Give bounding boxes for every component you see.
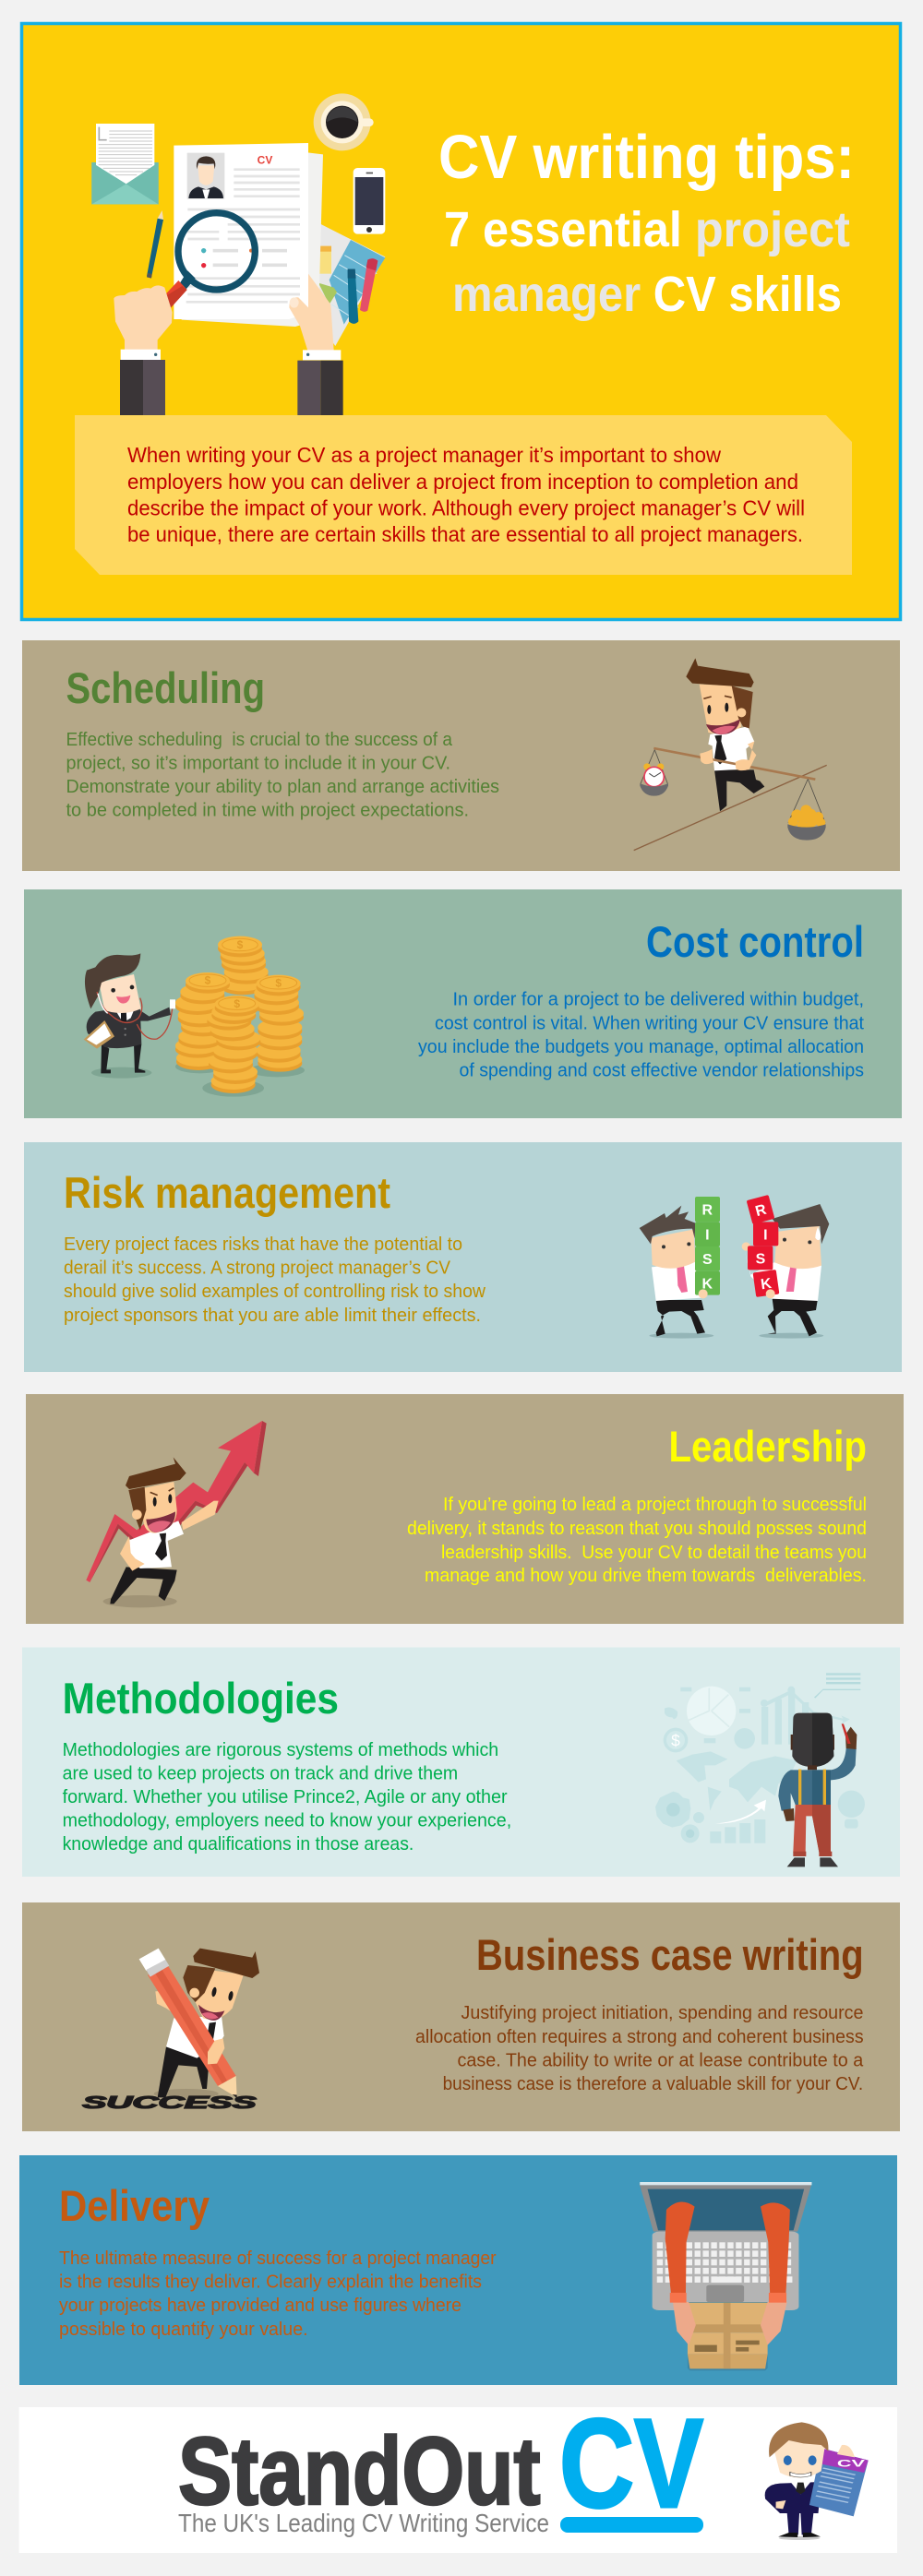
icon: man drawing business chart: $ <box>671 1731 680 1749</box>
pencil <box>148 1965 236 2086</box>
icon: man with stethoscope and coin stacks: $ <box>237 938 244 951</box>
front stack <box>207 996 260 1093</box>
icon: notebook and pens <box>318 223 385 346</box>
icon: CV document <box>174 143 323 327</box>
panel: risk management <box>24 1142 902 1372</box>
text block: delivery: is the results they deliver. Clearly explain the benefits <box>59 2272 482 2292</box>
text block: scheduling: to be completed in time with project expectations. <box>66 799 469 821</box>
text block: methodologies: knowledge and qualifications in those areas. <box>63 1833 414 1854</box>
text block: methodologies <box>63 1739 511 1854</box>
panel: hero header <box>22 24 901 620</box>
panel: business case writing <box>22 1902 900 2131</box>
text block: business case writing: allocation often requires a strong and coherent business <box>415 2026 864 2047</box>
heading: delivery: Delivery <box>59 2181 210 2230</box>
callout: introduction: employers how you can deliver a project from inception to completion and <box>127 470 798 494</box>
text block: scheduling: project, so it’s important to include it in your CV. <box>66 753 450 773</box>
icon: envelope with letter <box>91 124 159 204</box>
icon: pencil <box>147 210 163 279</box>
icon: man drawing business chart <box>655 1673 865 1866</box>
icon: magnifying glass <box>164 213 255 309</box>
icon: coffee cup <box>314 93 374 150</box>
text block: risk management: project sponsors that you are able limit their effects. <box>64 1305 481 1326</box>
title: CV writing tips: <box>438 123 855 192</box>
callout: introduction: When writing your CV as a project manager it’s important to show <box>127 443 721 467</box>
green blocks: R <box>702 1202 713 1218</box>
icon: mascot holding CV: CV <box>837 2457 866 2469</box>
text block: methodologies: are used to keep projects on track and drive them <box>63 1762 458 1784</box>
icon: mascot holding CV <box>765 2422 869 2540</box>
back stack <box>218 936 269 995</box>
heading: scheduling: Scheduling <box>66 663 265 712</box>
icon: man with stethoscope and coin stacks: $ <box>205 974 211 987</box>
panel: leadership <box>26 1394 904 1624</box>
text block: cost control: you include the budgets you manage, optimal allocation <box>418 1036 864 1057</box>
panel: methodologies <box>22 1648 900 1877</box>
text block: business case writing <box>415 2002 864 2094</box>
green blocks <box>695 1197 720 1295</box>
text block: cost control: In order for a project to be delivered within budget, <box>452 989 864 1009</box>
callout: introduction: be unique, there are certain skills that are essential to all project managers. <box>127 522 803 546</box>
heading: leadership: Leadership <box>668 1422 867 1471</box>
green blocks: I <box>705 1227 710 1243</box>
text block: leadership: manage and how you drive them towards deliverables. <box>425 1565 867 1586</box>
icon: man with giant pencil writing success: SUCCESS <box>82 2093 258 2112</box>
text block: methodologies: Methodologies are rigorous systems of methods which <box>63 1739 498 1760</box>
logo wordmark: CV <box>559 2393 703 2534</box>
text block: cost control: of spending and cost effective vendor relationships <box>460 1059 864 1081</box>
icon: laptop with delivery box <box>640 2182 811 2370</box>
icon: man with stethoscope and coin stacks: $ <box>275 976 282 989</box>
man <box>101 1044 111 1073</box>
icon: CV document: CV <box>258 153 272 166</box>
text block: cost control <box>418 989 864 1081</box>
text block: risk management: should give solid examples of controlling risk to show <box>64 1281 485 1302</box>
icon: two men holding risk blocks: K <box>760 1276 773 1293</box>
icon: two men holding risk blocks: S <box>756 1251 766 1267</box>
text block: leadership <box>407 1494 867 1586</box>
icon: two men holding risk blocks: R <box>754 1202 769 1220</box>
text block: delivery: possible to quantify your value. <box>59 2319 308 2340</box>
heading: business case writing: Business case writing <box>476 1930 864 1979</box>
heading: cost control: Cost control <box>646 917 864 966</box>
text block: delivery <box>59 2248 497 2340</box>
text block: scheduling: Demonstrate your ability to plan and arrange activities <box>66 776 499 797</box>
text block: scheduling: Effective scheduling is crucial to the success of a <box>66 729 453 750</box>
icon: CV desk illustration <box>91 93 385 415</box>
left stack <box>175 972 230 1070</box>
text block: leadership: leadership skills. Use your CV to detail the teams you <box>441 1542 867 1563</box>
green blocks: K <box>702 1277 713 1293</box>
heading: methodologies: Methodologies <box>63 1674 339 1723</box>
text block: leadership: delivery, it stands to reason that you should posses sound <box>407 1518 867 1539</box>
right stack <box>254 975 304 1072</box>
text block: risk management: derail it’s success. A strong project manager’s CV <box>64 1257 450 1279</box>
logo wordmark: The UK's Leading CV Writing Service <box>178 2509 549 2537</box>
icon: right hand and sleeve <box>289 274 343 415</box>
callout: introduction <box>75 415 852 575</box>
text block: methodologies: forward. Whether you utilise Prince2, Agile or any other <box>63 1786 508 1807</box>
right man <box>742 1204 829 1336</box>
text block: methodologies: methodology, employers need to know your experience, <box>63 1810 511 1831</box>
text block: business case writing: business case is therefore a valuable skill for your CV. <box>443 2073 863 2094</box>
icon: two men holding risk blocks <box>640 1195 829 1339</box>
text block: business case writing: Justifying project initiation, spending and resource <box>462 2002 864 2023</box>
red blocks <box>747 1195 779 1297</box>
panel: scheduling <box>22 640 900 871</box>
title: 7 essential project <box>444 202 850 257</box>
text block: cost control: cost control is vital. When writing your CV ensure that <box>435 1013 864 1033</box>
title <box>438 123 855 322</box>
text block: delivery: The ultimate measure of success for a project manager <box>59 2248 497 2269</box>
icon: man with stethoscope and coin stacks: $ <box>234 997 240 1010</box>
text block: leadership: If you’re going to lead a project through to successful <box>443 1494 867 1515</box>
text block: delivery: your projects have provided and use figures where <box>59 2295 462 2316</box>
callout: introduction: describe the impact of your work. Although every project manager’s CV will <box>127 496 805 520</box>
icon: man with stethoscope and coin stacks <box>84 936 305 1097</box>
icon: man balancing time and money <box>634 658 827 851</box>
title: manager CV skills <box>452 267 842 322</box>
icon: two men holding risk blocks: I <box>763 1227 768 1243</box>
icon: man pushing rising arrow <box>86 1421 267 1607</box>
icon: man with giant pencil writing success <box>82 1949 259 2112</box>
panel: delivery <box>19 2155 897 2385</box>
text block: risk management <box>64 1234 485 1326</box>
panel: cost control <box>24 889 902 1118</box>
text block: business case writing: case. The ability to write or at lease contribute to a <box>458 2050 864 2070</box>
text block: risk management: Every project faces risks that have the potential to <box>64 1234 462 1255</box>
logo wordmark: StandOut <box>178 2418 541 2525</box>
icon: phone <box>354 168 385 234</box>
green blocks: S <box>702 1252 713 1268</box>
text block: scheduling <box>66 729 499 821</box>
left man <box>640 1206 705 1336</box>
panel: StandOut CV logo footer <box>18 2393 897 2553</box>
logo wordmark <box>178 2393 703 2537</box>
heading: risk management: Risk management <box>64 1168 390 1217</box>
icon: left hand and sleeve <box>114 285 173 415</box>
